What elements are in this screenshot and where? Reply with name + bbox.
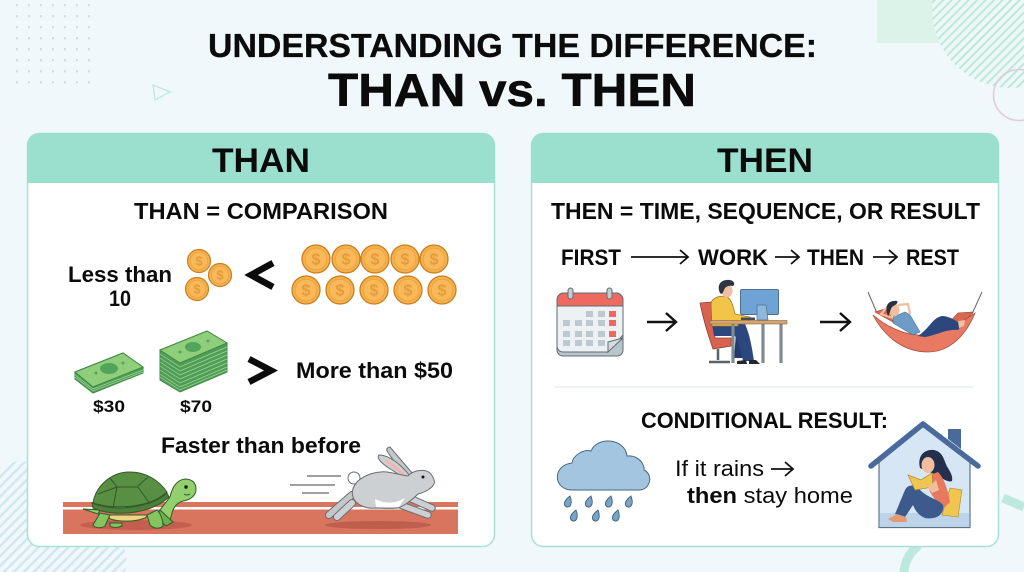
icon: house with reader [871,424,978,528]
arrow: calendar to work [647,313,676,331]
less-than sign [251,263,273,287]
icon: rain cloud [557,441,650,521]
text: if it rains then stay home: then stay home [687,483,853,508]
label: $30: $30 [93,397,125,416]
title [208,27,817,116]
panel header: then: THEN [717,142,813,180]
label: $70: $70 [180,397,212,416]
text: less than 10: Less than [68,262,172,287]
icon: turtle [83,472,196,528]
text: if it rains then stay home: If it rains [675,456,764,481]
text: more than $50: More than $50 [296,358,453,383]
panel header: than [27,133,495,183]
text: faster than before: Faster than before [161,433,361,458]
icon: three coins [186,250,232,300]
greater-than sign [249,359,271,382]
sequence row: first work then rest: WORK [698,245,768,270]
panel header: than: THAN [212,142,310,180]
icon: person at desk [700,280,787,364]
icon: person in hammock [868,292,982,352]
title: THAN vs. THEN [328,64,696,116]
icon: calendar [557,288,623,356]
sequence row: first work then rest: THEN [807,245,864,270]
icon: small cash stack [75,353,143,393]
icon: rabbit [290,447,434,517]
sequence row: first work then rest [561,245,959,270]
title: UNDERSTANDING THE DIFFERENCE: [208,27,817,64]
heading: conditional result: CONDITIONAL RESULT: [641,408,888,433]
text: less than 10: 10 [109,286,131,311]
subheading: than = comparison: THAN = COMPARISON [134,198,388,224]
icon: ten coins [292,245,456,304]
text: less than 10 [68,262,172,311]
panel header: then [531,133,999,183]
subheading: then = time, sequence, or result: THEN = TIME, SEQUENCE, OR RESULT [551,198,980,224]
running track [63,502,458,534]
arrow: work to rest [820,313,850,331]
panel: than [27,133,495,546]
panel: then [531,133,999,546]
icon: large cash stack [160,331,227,392]
text: if it rains then stay home [675,456,853,508]
sequence row: first work then rest: REST [906,245,959,270]
sequence row: first work then rest: FIRST [561,245,622,270]
divider [555,386,973,388]
